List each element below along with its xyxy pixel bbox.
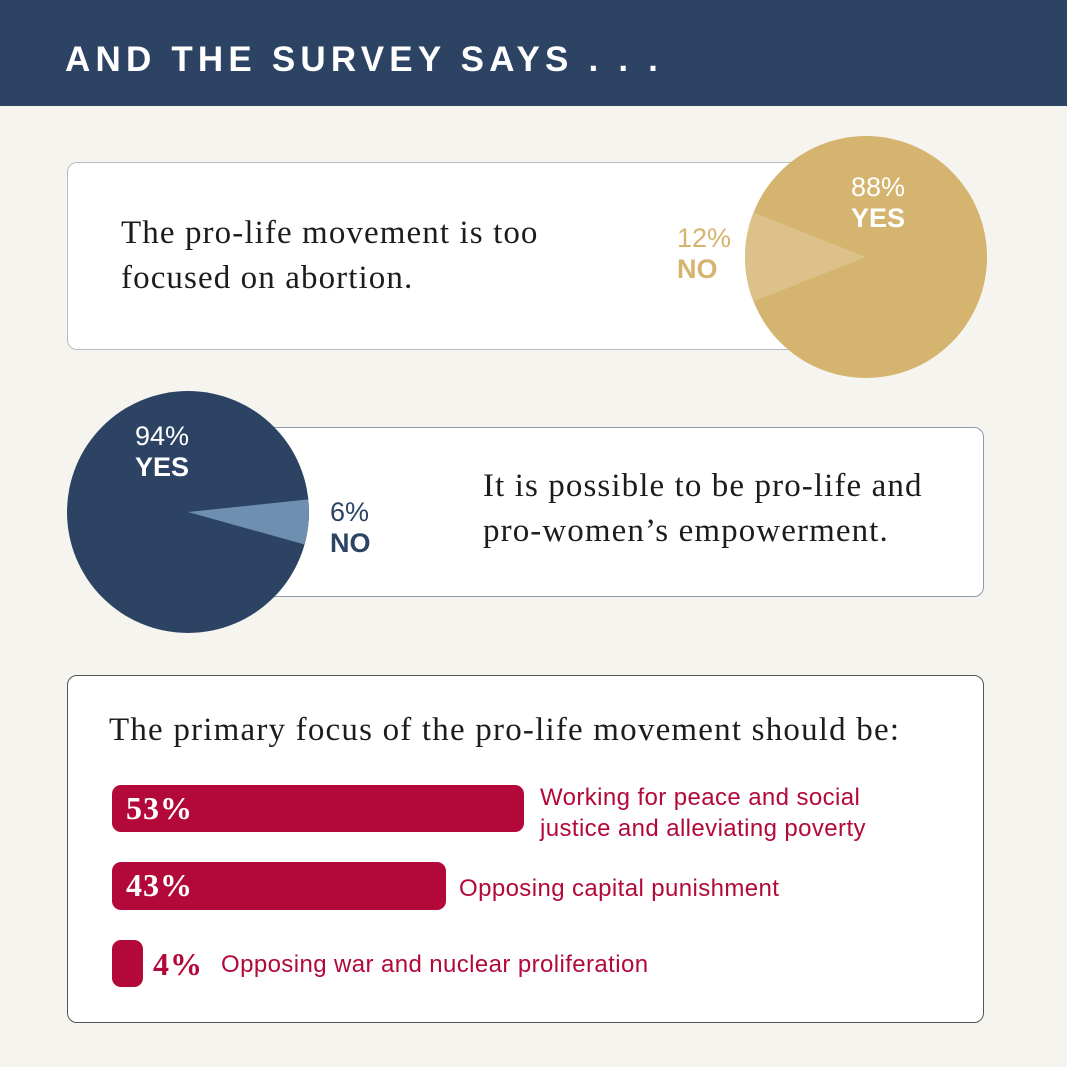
bar: 53% [112,785,524,832]
label: 88% yes: YES [851,203,905,233]
label: 88% yes [851,172,905,233]
title: AND THE SURVEY SAYS . . . [65,40,663,79]
label: war and nuclear: Opposing war and nuclear proliferation [221,951,648,978]
statement 1 [121,215,539,296]
label: 12% no [677,223,731,284]
label: 12% no: 12% [677,223,731,253]
bar: 43% [112,862,446,910]
statement 2: pro-women’s empowerment. [483,513,889,549]
statement 1: The pro-life movement is too [121,215,539,251]
statement 2 [483,468,923,549]
bar: 53%: 53% [126,790,193,826]
statement 2: It is possible to be pro-life and [483,468,923,504]
label: 6% no: 6% [330,497,369,527]
label: 88% yes: 88% [851,172,905,202]
label: 12% no: NO [677,254,718,284]
value: 4%: 4% [153,946,203,982]
label: peace and social justice: Working for peace and social [540,784,860,811]
label: peace and social justice: justice and alleviating poverty [540,815,866,842]
header band [0,0,1067,106]
label: 94% yes [135,421,189,482]
chart heading: The primary focus of the pro-life movement should be: [109,712,900,748]
panel: too focused on abortion [67,162,887,350]
panel: pro-women's empowerment [220,427,984,597]
panel: primary focus bar chart [67,675,984,1023]
label: 6% no: NO [330,528,370,558]
label: capital punishment: Opposing capital punishment [459,875,779,902]
label: 6% no [330,497,370,558]
label: peace and social justice [539,784,866,842]
label: 94% yes: YES [135,452,189,482]
label: 94% yes: 94% [135,421,189,451]
statement 1: focused on abortion. [121,260,413,296]
bar: 43%: 43% [126,867,193,903]
bar: 4% [112,940,143,987]
